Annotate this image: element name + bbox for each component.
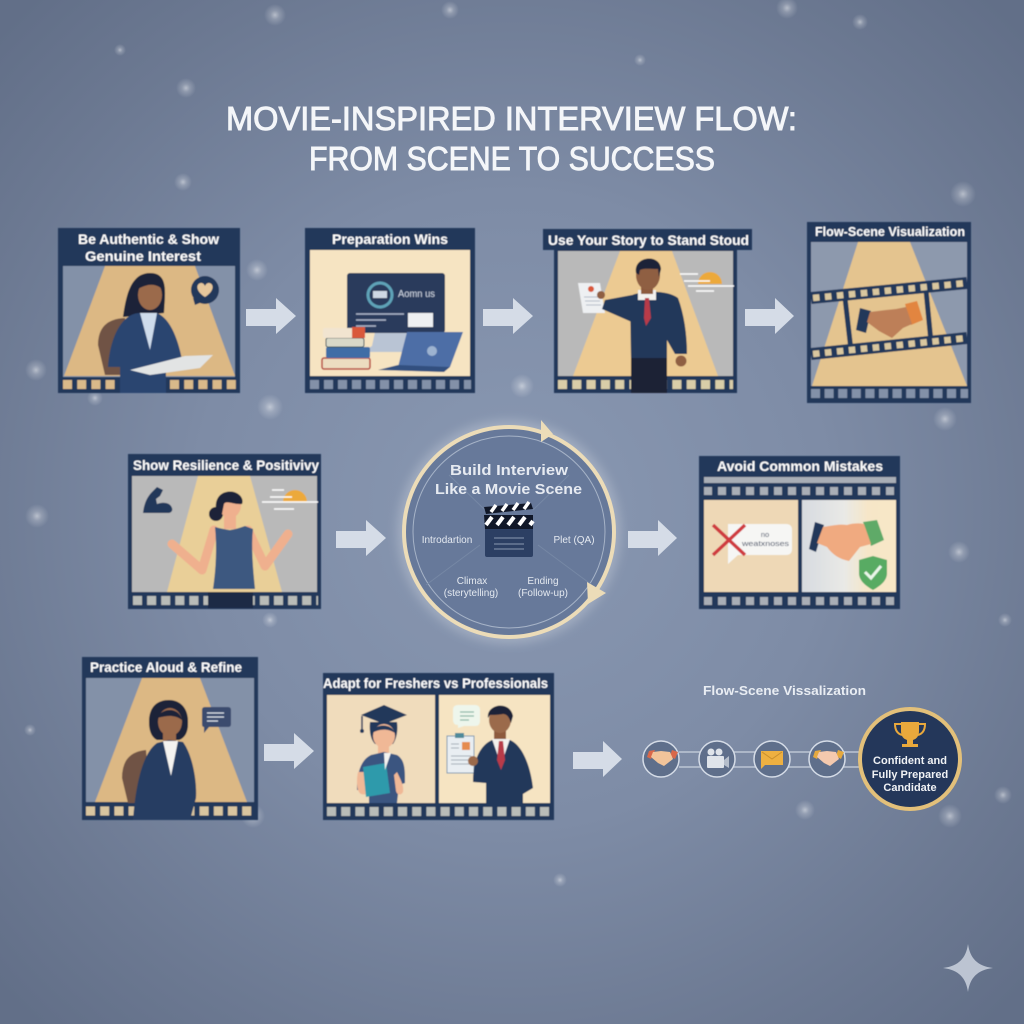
badge text [872,755,948,794]
heading: Build Interview [450,462,568,479]
panel: Preparation Wins [305,228,475,393]
film strip [327,807,551,816]
monitor [347,273,445,352]
arrow [573,741,622,777]
panel: Show Resilience & Positivivy [128,454,321,609]
scene labels: Introdartion [422,535,472,546]
arrow [264,733,314,769]
scene: handshake with shield [802,500,896,592]
resume document [578,283,605,313]
professional man with resume [447,705,533,803]
film strip [133,596,318,605]
icon: message envelope [754,741,790,777]
woman with open arms [172,492,288,608]
heading: Adapt for Freshers vs Professionals [323,675,548,691]
spotlight [573,251,718,376]
badge text: Candidate [883,782,937,794]
spotlight [95,678,247,802]
heading: Like a Movie Scene [435,481,582,498]
man presenting [597,258,687,393]
scene: no weaknesses [704,500,798,592]
ring arrowheads [541,420,606,604]
woman at desk [108,273,183,393]
heading: Use Your Story to Stand Stoud [548,232,749,248]
chair [122,750,150,803]
film strip [811,389,968,398]
panel: Use Your Story to Stand Stoud [543,229,752,393]
scene labels: (Follow-up) [518,588,568,599]
icon: flexed arm [143,487,172,513]
panel: Flow-Scene Visualization [807,222,971,403]
diagonal film reel [811,283,967,354]
panel: Practice Aloud & Refine [82,657,258,820]
icon: film camera [699,741,735,777]
sun icon [680,272,734,291]
panel: Be Authentic & Show Genuine Interest [58,228,240,393]
scene: no weaknesses: no [761,530,769,539]
title: FROM SCENE TO SUCCESS [309,140,715,177]
spotlight [812,242,967,386]
scene labels: Climax [457,576,487,587]
heading: Practice Aloud & Refine [90,659,242,675]
panel: Be Authentic & Show Genuine Interest: Be Authentic & Show [78,231,219,247]
icon: sparkle star [943,944,993,992]
arrow [483,298,533,334]
badge text: Confident and [873,755,947,767]
flow-scene visualization [643,683,960,809]
heading: Preparation Wins [332,231,448,247]
spotlight [64,266,235,376]
icon: clapperboard [484,502,533,557]
scene labels: (sterytelling) [444,588,498,599]
title [226,100,797,177]
panel: Adapt for Freshers vs Professionals [323,673,554,820]
scene labels [422,535,595,599]
heading: Flow-Scene Vissalization [703,683,866,698]
heading: Flow-Scene Visualization [815,224,965,239]
icon: heart speech bubble [191,276,219,305]
heading [58,228,233,265]
icon: handshake [643,741,679,777]
icon: trophy [895,722,925,747]
spotlight [167,476,282,592]
laptop [378,332,463,372]
circle: Build Interview Like a Movie Scene [397,420,621,644]
document [130,355,213,375]
heading: Avoid Common Mistakes [717,458,883,474]
badge: confident candidate [860,709,960,809]
arrow [246,298,296,334]
scene labels: Plet (QA) [553,535,595,546]
film strip [63,380,236,389]
icon: speech bubble [202,707,231,733]
heading: Show Resilience & Positivivy [133,457,319,473]
title: MOVIE-INSPIRED INTERVIEW FLOW: [226,100,797,137]
woman speaking [133,700,196,820]
icon: handshake [856,301,923,338]
arrow [745,298,794,334]
film strip [558,380,733,389]
film strip [310,380,471,389]
arrow [628,520,677,556]
graduate student [357,705,407,803]
panel: Avoid Common Mistakes [699,456,900,609]
scene labels: Ending [527,576,559,587]
badge text: Fully Prepared [872,769,948,781]
chair [98,318,125,375]
books [322,327,370,369]
arrow [336,520,386,556]
icon: handshake [809,741,845,777]
film strip top [704,487,897,495]
film strip [86,806,255,816]
connector lines [679,752,868,767]
sun icon [262,490,318,509]
heading [435,462,582,498]
film strip bottom [704,597,897,605]
monitor: Aomn us [398,289,435,300]
scene: no weaknesses: weatxnoses [741,539,789,548]
panel: Be Authentic & Show Genuine Interest: Genuine Interest [85,248,201,264]
